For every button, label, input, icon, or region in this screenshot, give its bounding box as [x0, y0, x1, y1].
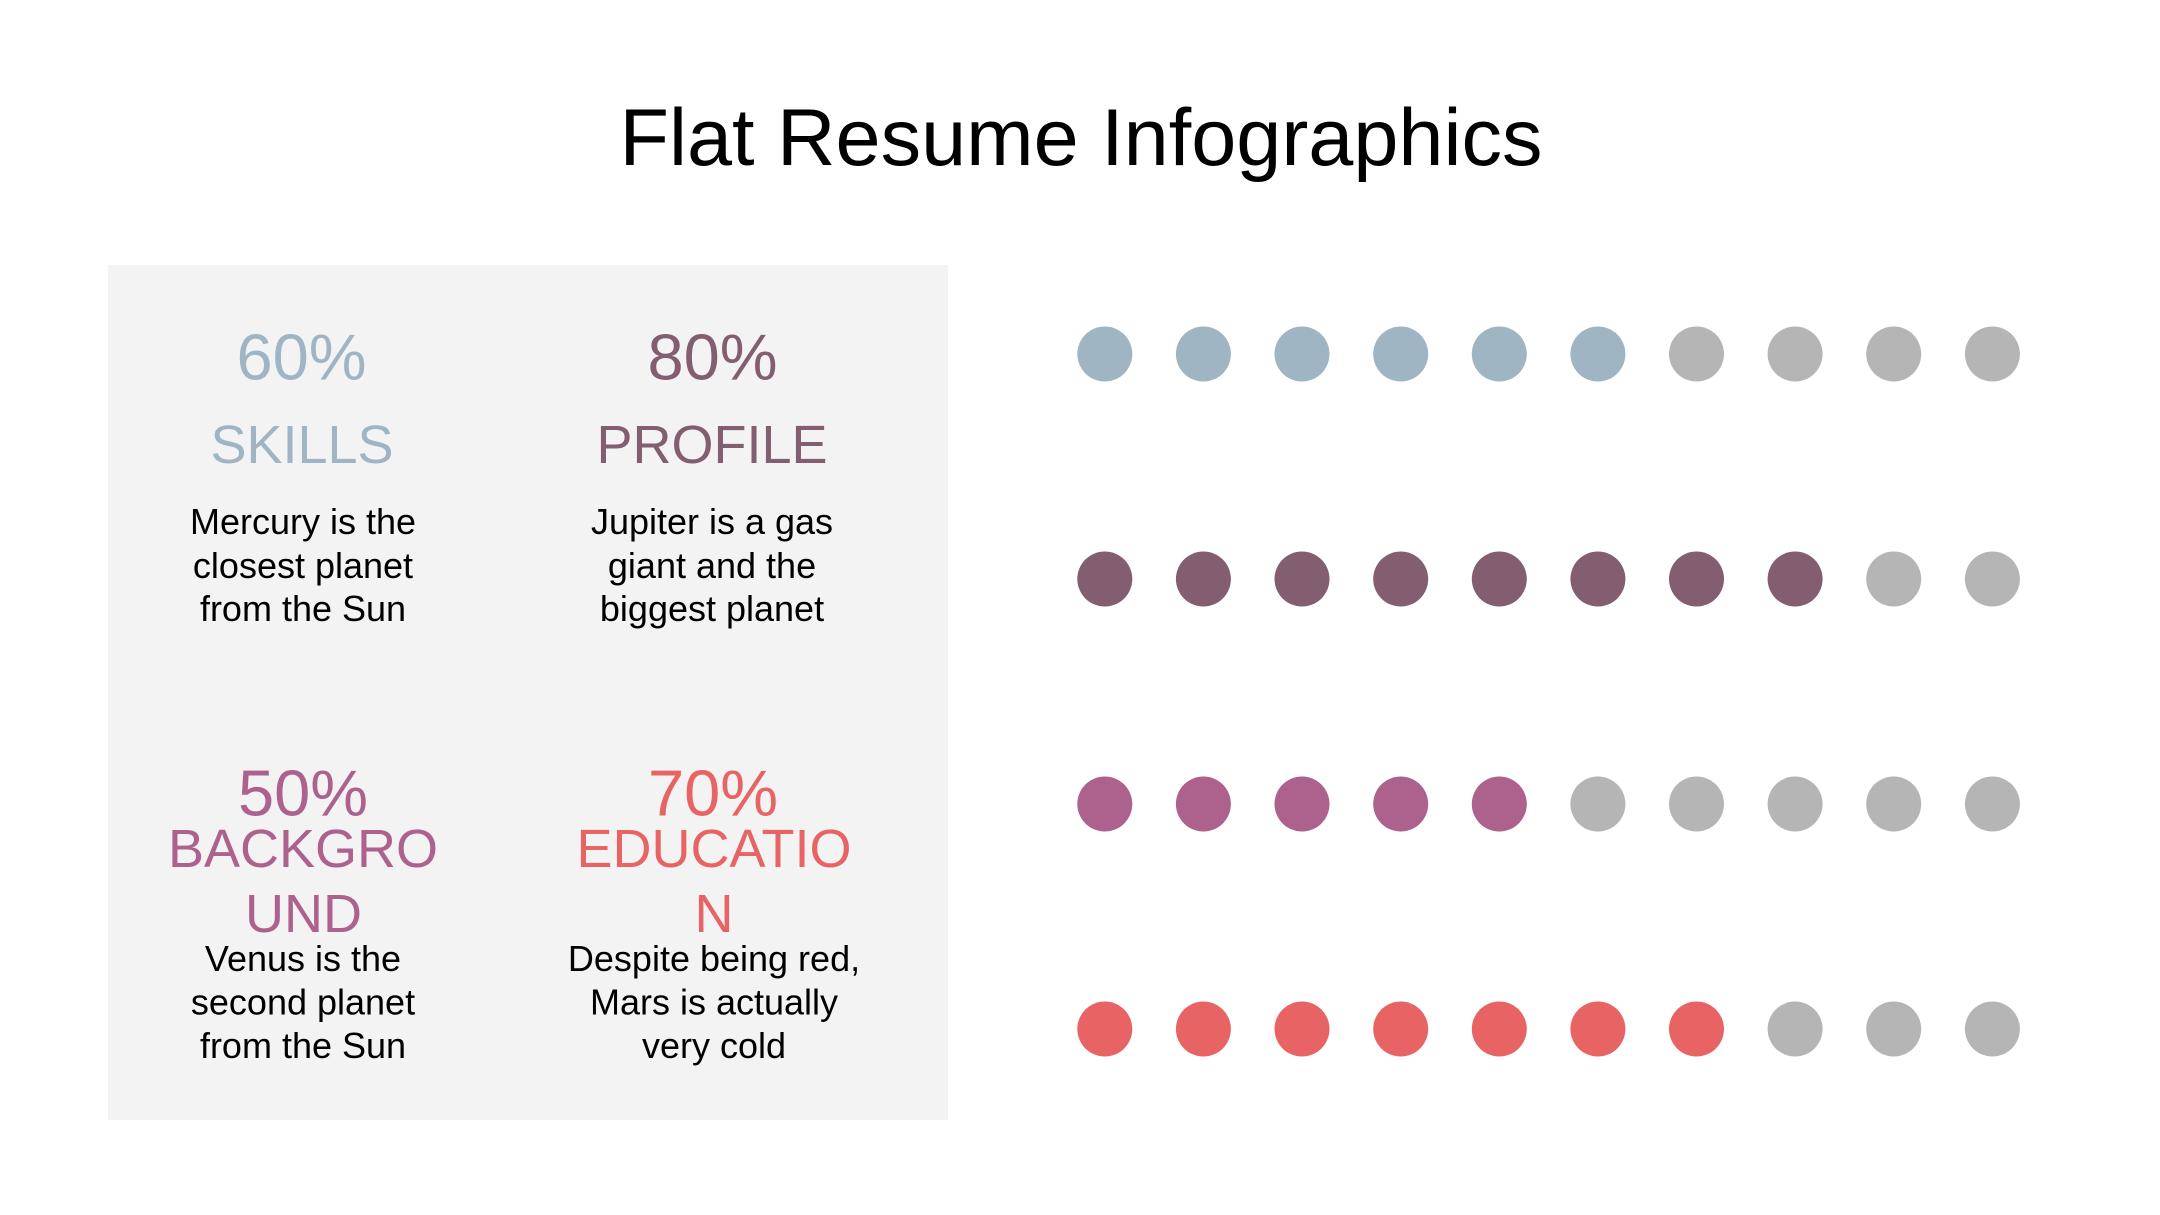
profile percentage: 80% [647, 320, 778, 394]
education heading: N [694, 884, 734, 944]
background description: second planet [191, 982, 415, 1022]
education description: Mars is actually [590, 982, 838, 1022]
background heading [168, 819, 438, 944]
profile heading: PROFILE [596, 415, 828, 475]
education description: very cold [642, 1025, 786, 1066]
profile description [591, 501, 833, 629]
skills description: closest planet [193, 545, 413, 586]
education percentage: 70% [648, 756, 778, 830]
education heading [576, 819, 852, 944]
background description [191, 938, 415, 1066]
education description [568, 938, 860, 1066]
profile description: Jupiter is a gas [591, 501, 833, 542]
profile description: biggest planet [600, 588, 824, 629]
education description: Despite being red, [568, 938, 860, 979]
skills heading: SKILLS [210, 415, 394, 475]
skills description: from the Sun [200, 588, 406, 629]
profile description: giant and the [608, 545, 816, 586]
panel: stats background [108, 265, 948, 1120]
education heading: EDUCATIO [576, 819, 852, 879]
skills description [190, 501, 416, 629]
background heading: UND [245, 884, 362, 944]
panel: profile text [591, 320, 833, 629]
background heading: BACKGRO [168, 819, 438, 879]
title: Flat Resume Infographics [620, 93, 1542, 183]
dot row: skills 60% [1077, 326, 2020, 382]
panel: education text [568, 756, 860, 1066]
skills description: Mercury is the [190, 501, 416, 542]
dot row: education 70% [1077, 1002, 2020, 1056]
panel: background text [168, 756, 438, 1066]
background description: from the Sun [200, 1025, 406, 1066]
panel: skills text [190, 320, 416, 629]
background description: Venus is the [205, 938, 401, 979]
skills percentage: 60% [236, 320, 367, 394]
dot row: background 50% [1077, 776, 2020, 832]
dot row: profile 80% [1077, 552, 2020, 606]
background percentage: 50% [238, 756, 368, 830]
